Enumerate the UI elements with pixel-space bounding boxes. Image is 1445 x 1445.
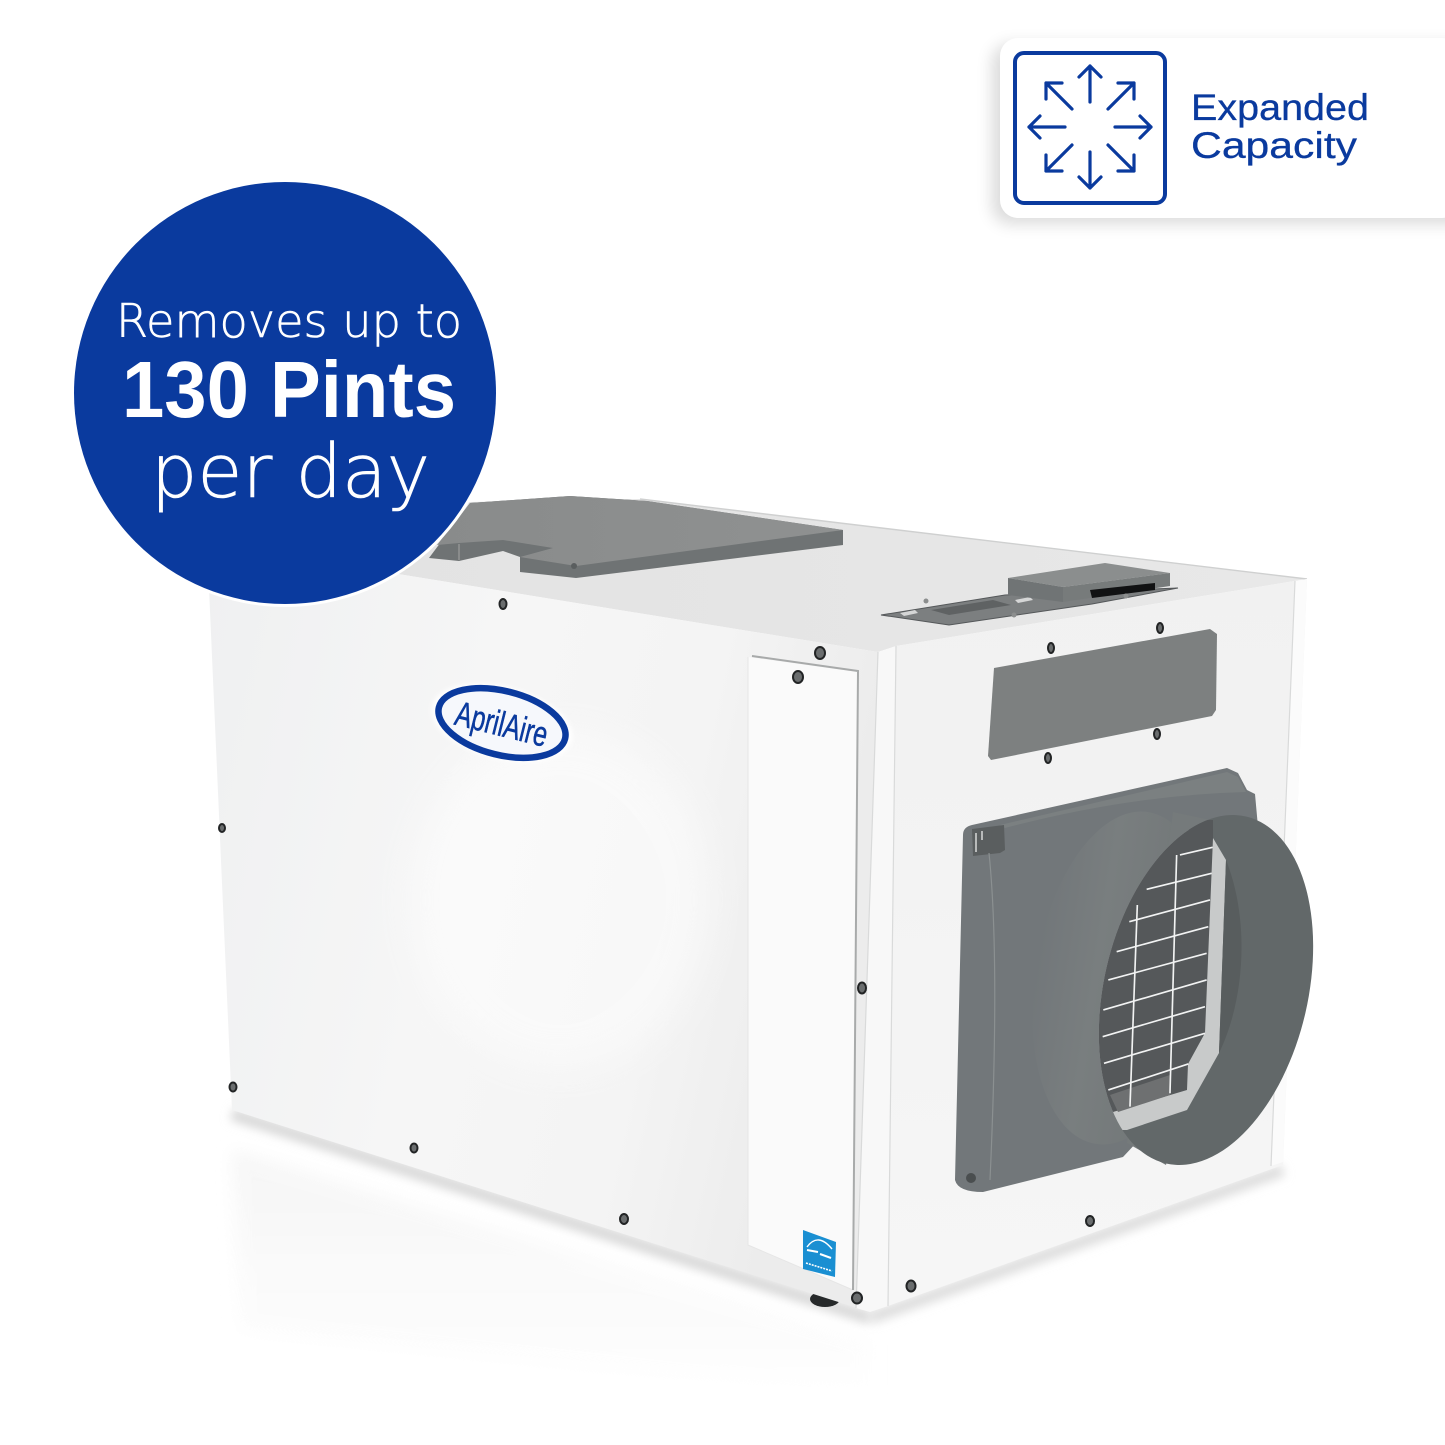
product: dehumidifier unit bbox=[207, 496, 1345, 1312]
top face bbox=[207, 499, 1307, 652]
control panel bbox=[881, 563, 1178, 625]
icon: expanding arrows in square bbox=[1015, 53, 1165, 203]
right face bbox=[888, 579, 1307, 1306]
service door panel bbox=[748, 656, 858, 1290]
top vent panel bbox=[988, 629, 1217, 760]
top lid bbox=[429, 496, 843, 578]
feet bbox=[313, 1121, 840, 1307]
badge: removes up to 130 pints per day: Removes up to bbox=[116, 294, 462, 348]
screws bbox=[219, 599, 1163, 1304]
front left face bbox=[207, 543, 878, 1312]
card: expanded capacity bbox=[992, 38, 1445, 224]
collar interior wall bbox=[1067, 794, 1345, 1186]
card: expanded capacity: Expanded bbox=[1191, 87, 1369, 128]
duct adapter plate bbox=[955, 768, 1270, 1192]
AprilAire logo bbox=[423, 671, 581, 775]
badge: removes up to 130 pints per day bbox=[71, 179, 499, 607]
badge: removes up to 130 pints per day: per day bbox=[151, 429, 430, 515]
seam bbox=[856, 581, 1295, 1308]
card: expanded capacity: Capacity bbox=[1191, 125, 1358, 166]
energy star label bbox=[803, 1230, 836, 1277]
filter mesh behind the opening bbox=[1085, 820, 1226, 1130]
soft highlight on front face bbox=[410, 730, 710, 1070]
floor reflection bbox=[232, 1114, 1283, 1400]
right edge strip bbox=[1271, 579, 1307, 1166]
corner bend strip bbox=[856, 646, 896, 1312]
AprilAire logo: AprilAire bbox=[451, 694, 552, 755]
round duct collar bbox=[1098, 815, 1314, 1165]
badge: removes up to 130 pints per day: 130 Pints bbox=[122, 345, 456, 434]
